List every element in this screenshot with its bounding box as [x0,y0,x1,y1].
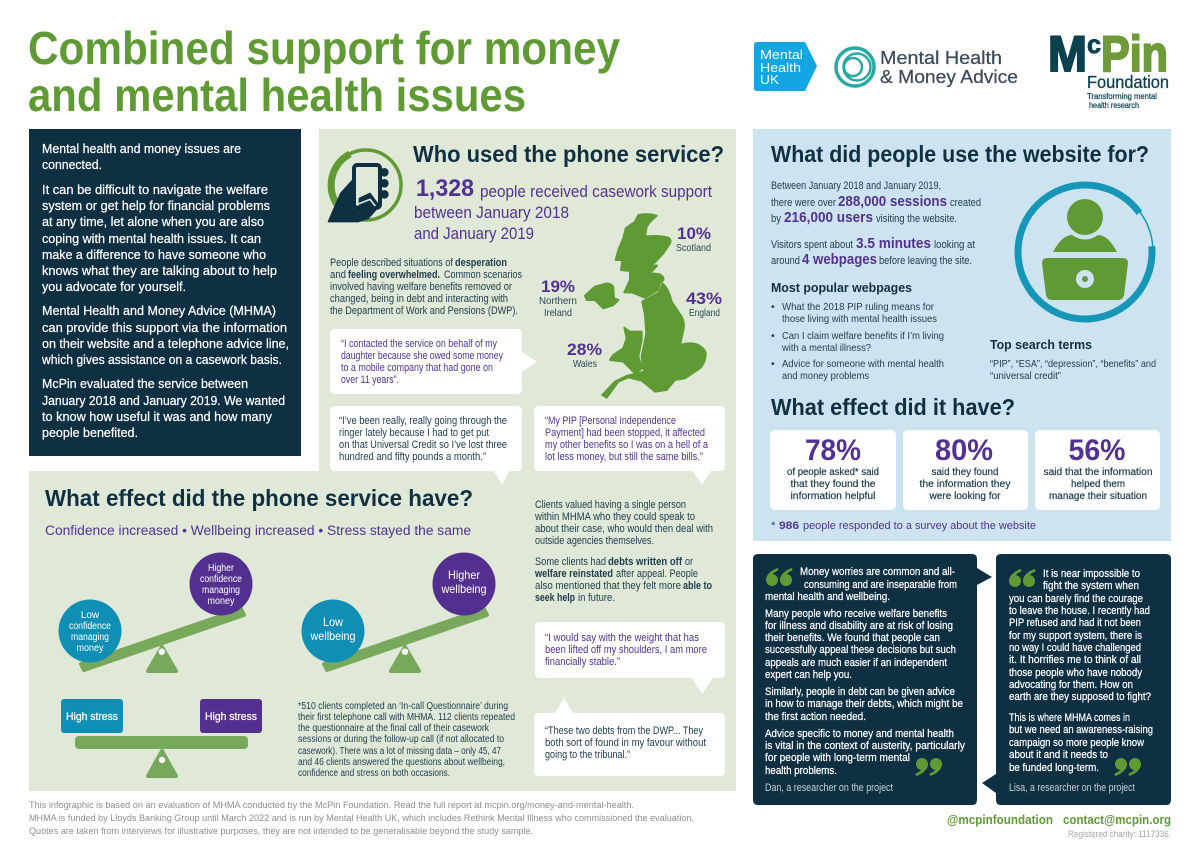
card: 56 percent: manage their situation [1049,491,1147,502]
quote panel: Dan: for illness and disability are at risk of losing [765,620,953,632]
see-saw: confidence: Low [81,610,100,621]
map labels: 19% [541,277,575,296]
quote bubble: PIP stopped: Payment] had been stopped, it affected [545,427,705,439]
text block: situations described: feeling overwhelmed. [348,269,440,281]
text block: situations described: the Department of Work and Pensions (DWP). [330,305,518,317]
text block: website statistics: 3.5 minutes [856,236,931,252]
quote bubble: universal credit: hundred and fifty pounds a month.” [339,451,486,463]
quote panel: Lisa: This is where MHMA comes in [1009,712,1130,724]
subheading: outcomes: Confidence increased • Wellbeing increased • Stress stayed the same [45,523,471,539]
quote panel: Dan: in how to manage their debts, which might be [765,698,963,710]
text block: client benefits: also mentioned that they felt more [535,580,681,592]
list: most popular webpages: What the 2018 PIP ruling means for [782,301,934,313]
footer: contact details: Registered charity: 1117336. [1068,829,1171,839]
see-saw: stress [61,699,262,776]
text block: client benefits: able to [683,580,712,592]
text block: website statistics: Visitors spent about [771,239,853,251]
footer: contact details: @mcpinfoundation [947,813,1053,827]
text block: client benefits: after appeal. People [616,568,698,580]
footnote: questionnaire: their first telephone call with MHMA. 112 clients repeated [298,712,515,723]
quote bubble: two debts [534,698,725,776]
text block: client benefits [534,499,713,604]
note: survey respondents: people responded to a survey about the website [803,520,1036,532]
map labels: 10% [677,224,711,243]
list: most popular webpages: • [771,301,775,313]
logo: McPin Foundation: Foundation [1087,72,1169,92]
panel: who used the phone service [328,141,725,485]
footnote: questionnaire [298,701,515,779]
quote panel: Dan: for people with long-term mental [765,752,910,764]
text block: website statistics [771,180,981,268]
headline statistic: and January 2019 [414,225,534,243]
logo: Mental Health UK: Mental [760,47,803,62]
panel: introduction: can provide this support via the information [42,321,287,335]
list: most popular webpages: those living with mental health issues [782,313,937,325]
icon: opening quote mark [766,568,792,586]
quote panel: Lisa: campaign so more people know [1009,737,1144,749]
quote bubble: daughter: over 11 years”. [341,374,399,386]
headline statistic: between January 2018 [414,204,569,222]
quote bubble: PIP stopped: my other benefits so I was on a hell of a [545,439,708,451]
see-saw: wellbeing: wellbeing [310,629,356,643]
quote panel: Lisa: It is near impossible to [1043,568,1140,580]
quote bubble: daughter [330,329,537,394]
see-saw: wellbeing [302,552,496,671]
panel: introduction: make a difference to have someone who [42,248,266,262]
quote bubble: PIP stopped [534,406,725,485]
quote panel: Dan: expert can help you. [765,669,852,681]
see-saw: confidence [58,552,252,671]
see-saw: confidence: managing [71,632,109,643]
icon: closing quote mark [1114,758,1141,776]
quote panel: Lisa: it. It horrifies me to think of all [1009,654,1141,666]
quote panel: Dan: the first action needed. [765,711,866,723]
see-saw: wellbeing: wellbeing [441,582,486,596]
text block: website statistics: created [950,197,981,209]
card: 80 percent: 80% [935,434,993,467]
text block: website statistics: 288,000 sessions [838,194,947,210]
quote bubble: two debts: “These two debts from the DWP... They [545,725,704,737]
quote panel: Dan: Similarly, people in debt can be given advice [765,686,955,698]
card: 80 percent: were looking for [928,491,1001,502]
quote bubble: weight lifted: been lifted off my shoulders, I am more [545,644,707,656]
map labels: 28% [567,340,602,359]
text block: client benefits: within MHMA who they could speak to [534,511,695,523]
card: 78 percent: of people asked* said [787,467,879,478]
card: 56 percent: said that the information [1044,467,1152,478]
footer: report notes: Quotes are taken from interviews for illustrative purposes, they are not intended to be generalisable beyond the study sample. [29,825,533,836]
heading: who used the phone service: Who used the phone service? [413,141,724,167]
quote bubble: universal credit: “I’ve been really, really going through the [339,415,507,427]
title [28,22,620,121]
text block: top search terms: Top search terms [990,337,1092,352]
quote bubble: PIP stopped: lot less money, but still the same bills.” [545,451,703,463]
quote panel: Dan [753,554,992,805]
quote bubble: weight lifted [535,622,725,694]
logo: McPin Foundation: Transforming mental [1087,92,1157,101]
quote panel: Lisa [982,554,1171,805]
panel: introduction [29,129,301,456]
quote bubble: universal credit [330,406,522,485]
text block: website statistics: there were over [771,197,836,209]
logo: McPin Foundation [1048,26,1169,110]
list: most popular webpages: • [771,330,775,342]
quote panel: Lisa: Lisa, a researcher on the project [1009,782,1135,794]
logo: Mental Health UK: UK [760,72,779,87]
quote panel: Dan: Many people who receive welfare benefits [765,608,947,620]
text block: website statistics: before leaving the site. [879,255,972,267]
quote panel: Lisa: but we need an awareness-raising [1009,724,1153,736]
text block: top search terms: “universal credit” [990,370,1061,382]
icon: hand holding phone [328,150,401,222]
list: most popular webpages: Can I claim welfare benefits if I’m living [782,330,944,342]
map: UK regions [585,214,706,398]
text block: website statistics: Between January 2018 and January 2019, [771,180,941,192]
quote panel: Dan: successfully appeal these decisions but such [765,644,956,656]
logo: McPin Foundation: c [1087,29,1101,59]
text block: top search terms: “PIP”, “ESA”, “depression”, “benefits” and [990,358,1156,370]
logo: McPin Foundation: Pin [1101,26,1168,82]
card: 78 percent: 78% [805,434,861,467]
panel: introduction: Mental Health and Money Advice (MHMA) [42,304,276,318]
quote bubble: two debts: going to the tribunal.” [545,749,630,761]
quote panel: Dan: Dan, a researcher on the project [765,782,893,794]
card: 78 percent [770,430,896,510]
quote bubble: two debts: both sort of found in my favour without [545,737,706,749]
quote panel: Lisa: fight the system when [1043,580,1139,592]
quote panel: Lisa: for my support system, there is [1009,630,1142,642]
quote panel: Dan: appeals are much easier if an independent [765,657,947,669]
card: 78 percent: that they found the [790,479,876,490]
map labels: 43% [686,289,722,308]
quote panel: Dan: health problems. [765,765,837,777]
text block: client benefits: welfare reinstated [534,568,613,580]
headline statistic: people received casework support [480,183,712,201]
logo: McPin Foundation: health research [1089,101,1139,110]
card: 56 percent: helped them [1071,479,1125,490]
quote bubble: weight lifted: “I would say with the weight that has [545,632,699,644]
card: 80 percent [903,430,1028,510]
text block: client benefits: seek help [535,592,575,604]
quote panel: Lisa: PIP refused and had it not been [1009,617,1141,629]
list: most popular webpages [771,280,944,382]
see-saw: confidence: Higher [208,563,235,574]
map labels: Ireland [544,307,572,319]
icon: closing quote mark [916,758,942,776]
map labels: Scotland [676,242,711,254]
logo: Mental Health UK: Health [760,60,801,75]
footer: report notes: MHMA is funded by Lloyds Banking Group until March 2022 and is run by Mental Health UK, which includes Rethink Mental Illness who commissioned the evaluation. [29,812,694,823]
quote panel: Dan: Advice specific to money and mental health [765,728,954,740]
see-saw: confidence: managing [202,585,240,596]
heading: website use: What did people use the website for? [771,141,1149,167]
list: most popular webpages: Most popular webpages [771,280,912,295]
text block: client benefits: outside agencies themselves. [535,535,654,547]
panel: introduction: on their website and a telephone advice line, [42,337,289,351]
footer: report notes [29,799,694,836]
icon: person at laptop [1012,179,1158,325]
text block: website statistics: looking at [934,239,975,251]
list: most popular webpages: Advice for someone with mental health [782,358,944,370]
quote panel: Lisa: be funded long-term. [1009,762,1099,774]
heading: website effect: What effect did it have? [771,394,1015,420]
card: 78 percent: information helpful [790,491,876,502]
text block: website statistics: around [771,255,800,267]
footer: report notes: This infographic is based on an evaluation of MHMA conducted by the McPin Foundation. Read the full report at mcpin.org/money-and-mental-health. [29,799,634,810]
panel: introduction: at any time, let alone when you are also [42,215,264,229]
panel: introduction: Mental health and money issues are [42,142,241,156]
panel: introduction: to know how useful it was and how many [42,410,273,424]
footnote: questionnaire: and 46 clients answered the questions about wellbeing, [298,757,505,768]
icon: opening quote mark [1009,569,1036,587]
card: 80 percent: the information they [920,479,1010,490]
note: survey respondents: 986 [779,520,799,532]
panel: introduction: connected. [42,158,102,172]
footnote: questionnaire: the questionnaire at the final call of their casework [298,723,489,734]
see-saw: wellbeing: Higher [448,568,480,582]
title: Combined support for money [28,22,620,74]
text block: situations described: changed, being in debt and interacting with [330,293,508,305]
text block: website statistics: by [771,213,782,225]
quote panel: Lisa: to leave the house. I recently had [1009,605,1150,617]
footer: contact details [947,813,1171,839]
panel: introduction: you advocate for yourself. [42,280,186,294]
quote panel: Dan: Money worries are common and all- [800,566,955,578]
panel: introduction: system or get help for financial problems [42,199,270,213]
headline statistic [414,175,712,243]
quote bubble: daughter: daughter because she owed some money [341,350,504,362]
quote bubble: PIP stopped: “My PIP [Personal Independence [545,415,676,427]
text block: client benefits: Clients valued having a single person [535,499,686,511]
card: 56 percent [1035,430,1160,510]
text block: situations described: People described situations of [330,257,453,269]
text block: website statistics: 216,000 users [784,210,873,226]
map labels: England [689,307,720,319]
see-saw: confidence: confidence [200,574,242,585]
quote panel: Dan: is vital in the context of austerity, particularly [765,740,965,752]
list: most popular webpages: • [771,358,775,370]
card: 56 percent: 56% [1068,434,1126,467]
panel: effect of the phone service [45,485,725,779]
panel: phone service background [29,129,736,791]
logo: Mental Health and Money Advice: Mental Health [880,47,1002,68]
text block: situations described: involved having welfare benefits removed or [330,281,512,293]
panel: introduction: coping with mental health issues. It can [42,232,261,246]
quote panel: Lisa: you can barely find the courage [1009,593,1143,605]
logo: Mental Health and Money Advice: & Money Advice [880,66,1018,87]
footnote: questionnaire: confidence and stress on both occasions. [298,768,450,779]
logo: Mental Health UK [754,42,817,91]
text block: situations described: desperation [455,257,507,269]
quote bubble: universal credit: on that Universal Credit so I’ve lost three [339,439,507,451]
footnote: questionnaire: *510 clients completed an ‘In-call Questionnaire’ during [298,701,508,712]
panel: introduction: which gives assistance on a casework basis. [41,353,282,367]
see-saw: confidence: money [76,643,104,654]
quote panel: Lisa: those people who have nobody [1009,667,1142,679]
see-saw: wellbeing: Low [323,615,343,629]
logo: McPin Foundation: M [1048,26,1087,82]
panel: introduction: people benefited. [42,426,138,440]
see-saw: confidence: confidence [69,621,111,632]
heading: effect of the phone service: What effect did the phone service have? [45,485,473,511]
text block: website statistics: visiting the website. [876,213,957,225]
logo: Mental Health and Money Advice [836,47,1018,87]
list: most popular webpages: and money problems [782,370,869,382]
card: 80 percent: said they found [932,467,998,478]
panel: introduction: knows what they are talking about to help [42,264,277,278]
text block: top search terms [990,337,1156,382]
map labels: Wales [573,358,597,370]
quote panel: Dan: their benefits. We found that people can [765,632,940,644]
quote panel: Lisa: no way I could have challenged [1009,642,1141,654]
text block: website statistics: 4 webpages [802,252,877,268]
footnote: questionnaire: sessions or during the follow-up call (if not allocated to [298,734,504,745]
quote panel: Lisa: earth are they supposed to fight? [1009,691,1151,703]
see-saw: stress: High stress [66,711,118,723]
note: survey respondents: * [771,520,776,532]
quote panel: Dan: mental health and wellbeing. [765,591,890,603]
footnote: questionnaire: casework). There was a lot of missing data – only 45, 47 [298,746,501,757]
footer: contact details: contact@mcpin.org [1063,813,1171,827]
quote bubble: universal credit: ringer lately because I had to get put [339,427,489,439]
see-saw: stress: High stress [205,711,257,723]
quote bubble: daughter: “I contacted the service on behalf of my [341,338,498,350]
panel: introduction: McPin evaluated the service between [42,377,248,391]
quote bubble: daughter: to a mobile company that had gone on [341,362,493,374]
title: and mental health issues [28,69,526,121]
text block: client benefits: or [685,556,693,568]
map labels: Northern [539,295,577,307]
headline statistic: 1,328 [416,175,474,202]
panel: introduction: January 2018 and January 2019. We wanted [42,394,285,408]
text block: situations described [330,257,522,317]
quote bubble: weight lifted: financially stable.” [545,656,620,668]
text block: client benefits: debts written off [608,556,682,568]
text block: client benefits: about their case, who would then deal with [535,523,713,535]
quote panel: Lisa: advocating for them. How on [1009,679,1133,691]
text block: client benefits: in future. [578,592,615,604]
text block: situations described: Common scenarios [444,269,522,281]
list: most popular webpages: with a mental illness? [781,342,871,354]
quote panel: Lisa: about it and it needs to [1009,749,1108,761]
quote panel: Dan: consuming and are inseparable from [804,579,957,591]
text block: situations described: and [330,269,346,281]
text block: client benefits: Some clients had [535,556,606,568]
see-saw: confidence: money [208,596,234,607]
panel: website use [753,129,1171,541]
panel: introduction: It can be difficult to navigate the welfare [42,183,268,197]
map labels [539,224,722,370]
